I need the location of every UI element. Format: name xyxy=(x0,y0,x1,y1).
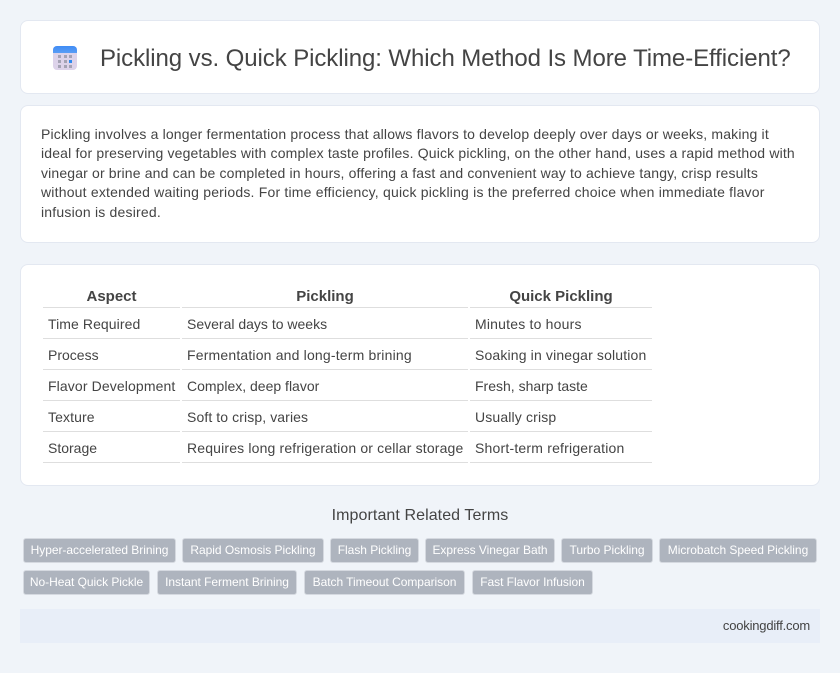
text block: intro paragraph: Pickling involves a longer fermentation process that allows flavors to develop deeply over days or weeks, making it xyxy=(41,126,769,142)
comparison table: Texture xyxy=(48,409,95,425)
title: Pickling vs. Quick Pickling: Which Method Is More Time-Efficient? xyxy=(100,45,791,72)
comparison table: Pickling xyxy=(296,288,354,305)
comparison table: Minutes to hours xyxy=(475,316,582,332)
related term tags: Instant Ferment Brining xyxy=(165,575,289,589)
comparison table xyxy=(43,288,652,463)
icon: calendar xyxy=(53,46,77,70)
related term tags xyxy=(23,538,817,595)
text block: intro paragraph: infusion is desired. xyxy=(41,204,161,220)
related term tags: Rapid Osmosis Pickling xyxy=(190,543,316,557)
panel: intro xyxy=(20,105,820,243)
panel: header xyxy=(20,20,820,94)
comparison table: Soft to crisp, varies xyxy=(187,409,308,425)
comparison table: Fresh, sharp taste xyxy=(475,378,588,394)
comparison table: Several days to weeks xyxy=(187,316,327,332)
comparison table: Usually crisp xyxy=(475,409,556,425)
related term tags: Microbatch Speed Pickling xyxy=(668,543,808,557)
panel: comparison table xyxy=(20,264,820,486)
related term tags: Fast Flavor Infusion xyxy=(480,575,585,589)
comparison table: Fermentation and long-term brining xyxy=(187,347,412,363)
related term tags: No-Heat Quick Pickle xyxy=(30,575,143,589)
related term tags: Turbo Pickling xyxy=(569,543,645,557)
comparison table: Requires long refrigeration or cellar storage xyxy=(187,440,463,456)
comparison table: Storage xyxy=(48,440,97,456)
text block: intro paragraph: ideal for preserving vegetables with complex taste profiles. Quick pickling, on the other hand, uses a rapid method with xyxy=(41,145,795,161)
related term tags: Flash Pickling xyxy=(338,543,411,557)
related term tags: Batch Timeout Comparison xyxy=(313,575,456,589)
text block: intro paragraph: without extended waiting periods. For time efficiency, quick pickling is the preferred choice when immediate flavor xyxy=(41,184,765,200)
comparison table: Time Required xyxy=(48,316,140,332)
comparison table: Short-term refrigeration xyxy=(475,440,625,456)
comparison table: Soaking in vinegar solution xyxy=(475,347,646,363)
comparison table: Aspect xyxy=(86,288,137,305)
footer source text: cookingdiff.com xyxy=(723,618,810,633)
related term tags: Hyper-accelerated Brining xyxy=(31,543,168,557)
text block: intro paragraph: vinegar or brine and can be completed in hours, offering a fast and convenient way to achieve tangy, crisp results xyxy=(41,165,758,181)
footer bar xyxy=(20,609,820,643)
comparison table: Quick Pickling xyxy=(509,288,613,305)
related term tags: Express Vinegar Bath xyxy=(432,543,548,557)
comparison table: Flavor Development xyxy=(48,378,175,394)
comparison table: Complex, deep flavor xyxy=(187,378,319,394)
text block: intro paragraph xyxy=(41,126,795,220)
heading: related terms: Important Related Terms xyxy=(332,507,508,524)
comparison table: Process xyxy=(48,347,99,363)
